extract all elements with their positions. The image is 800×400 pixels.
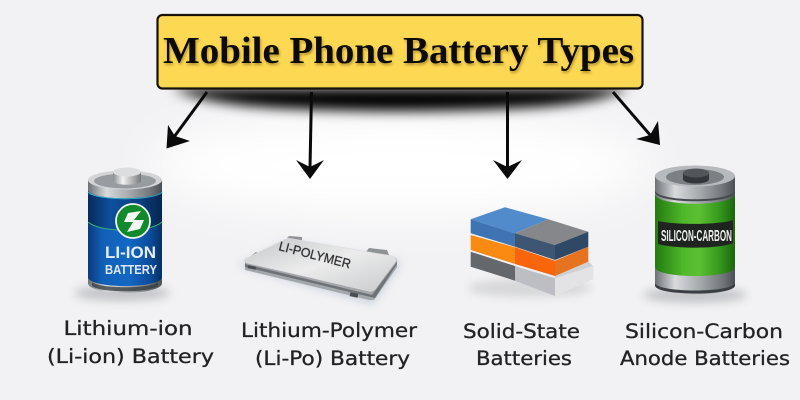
caption: lithium-polymer: (Li-Po) Battery: [255, 347, 410, 370]
battery label: BATTERY: [105, 263, 158, 277]
middle layer: [471, 235, 515, 264]
caption: silicon-carbon: Anode Batteries: [620, 347, 790, 370]
plate label: LI-POLYMER: [277, 239, 352, 271]
title shadow text: Mobile Phone Battery Types: [164, 32, 635, 74]
icon: li-polymer battery: [238, 236, 402, 304]
bottom metal ring: [88, 272, 162, 293]
top metal cap: [88, 180, 162, 198]
top layer: [471, 207, 548, 233]
icon: solid-state battery: [468, 207, 593, 297]
bottom layer: [471, 252, 515, 281]
caption: silicon-carbon: [620, 320, 790, 370]
caption: lithium-ion: (Li-ion) Battery: [47, 345, 214, 368]
caption: solid-state: [463, 320, 580, 370]
ports: [248, 265, 256, 270]
arrow: to lithium-polymer: [296, 92, 324, 179]
caption: lithium-ion: [47, 317, 214, 368]
arrow: to silicon-carbon: [613, 92, 660, 145]
green body: [655, 195, 735, 276]
arrow: to lithium-ion: [166, 92, 207, 148]
side: [245, 258, 397, 300]
caption: lithium-polymer: Lithium-Polymer: [241, 319, 418, 342]
title shadow: [172, 88, 628, 111]
title: Mobile Phone Battery Types: [163, 30, 634, 72]
bottom metal ring: [655, 268, 735, 294]
tabs: [287, 236, 302, 241]
terminal: [683, 173, 709, 184]
dark band: [658, 220, 733, 248]
caption: lithium-ion: Lithium-ion: [64, 317, 192, 340]
top metal cap: [655, 176, 735, 204]
title banner: [158, 15, 642, 88]
terminal: [113, 172, 141, 185]
arrow: to solid-state: [493, 92, 522, 179]
caption: silicon-carbon: Silicon-Carbon: [625, 320, 783, 343]
icon: li-ion battery: [74, 168, 170, 301]
blue body: [88, 190, 162, 286]
top plate: [244, 238, 396, 291]
band label: SILICON-CARBON: [661, 228, 732, 245]
li-ion label: LI-ION: [105, 243, 156, 262]
caption: solid-state: Batteries: [476, 347, 572, 370]
caption: solid-state: Solid-State: [463, 320, 580, 343]
icon: silicon-carbon battery: [643, 166, 747, 303]
teal line: [88, 192, 162, 199]
caption: lithium-polymer: [241, 319, 418, 370]
charge badge: [116, 204, 150, 238]
